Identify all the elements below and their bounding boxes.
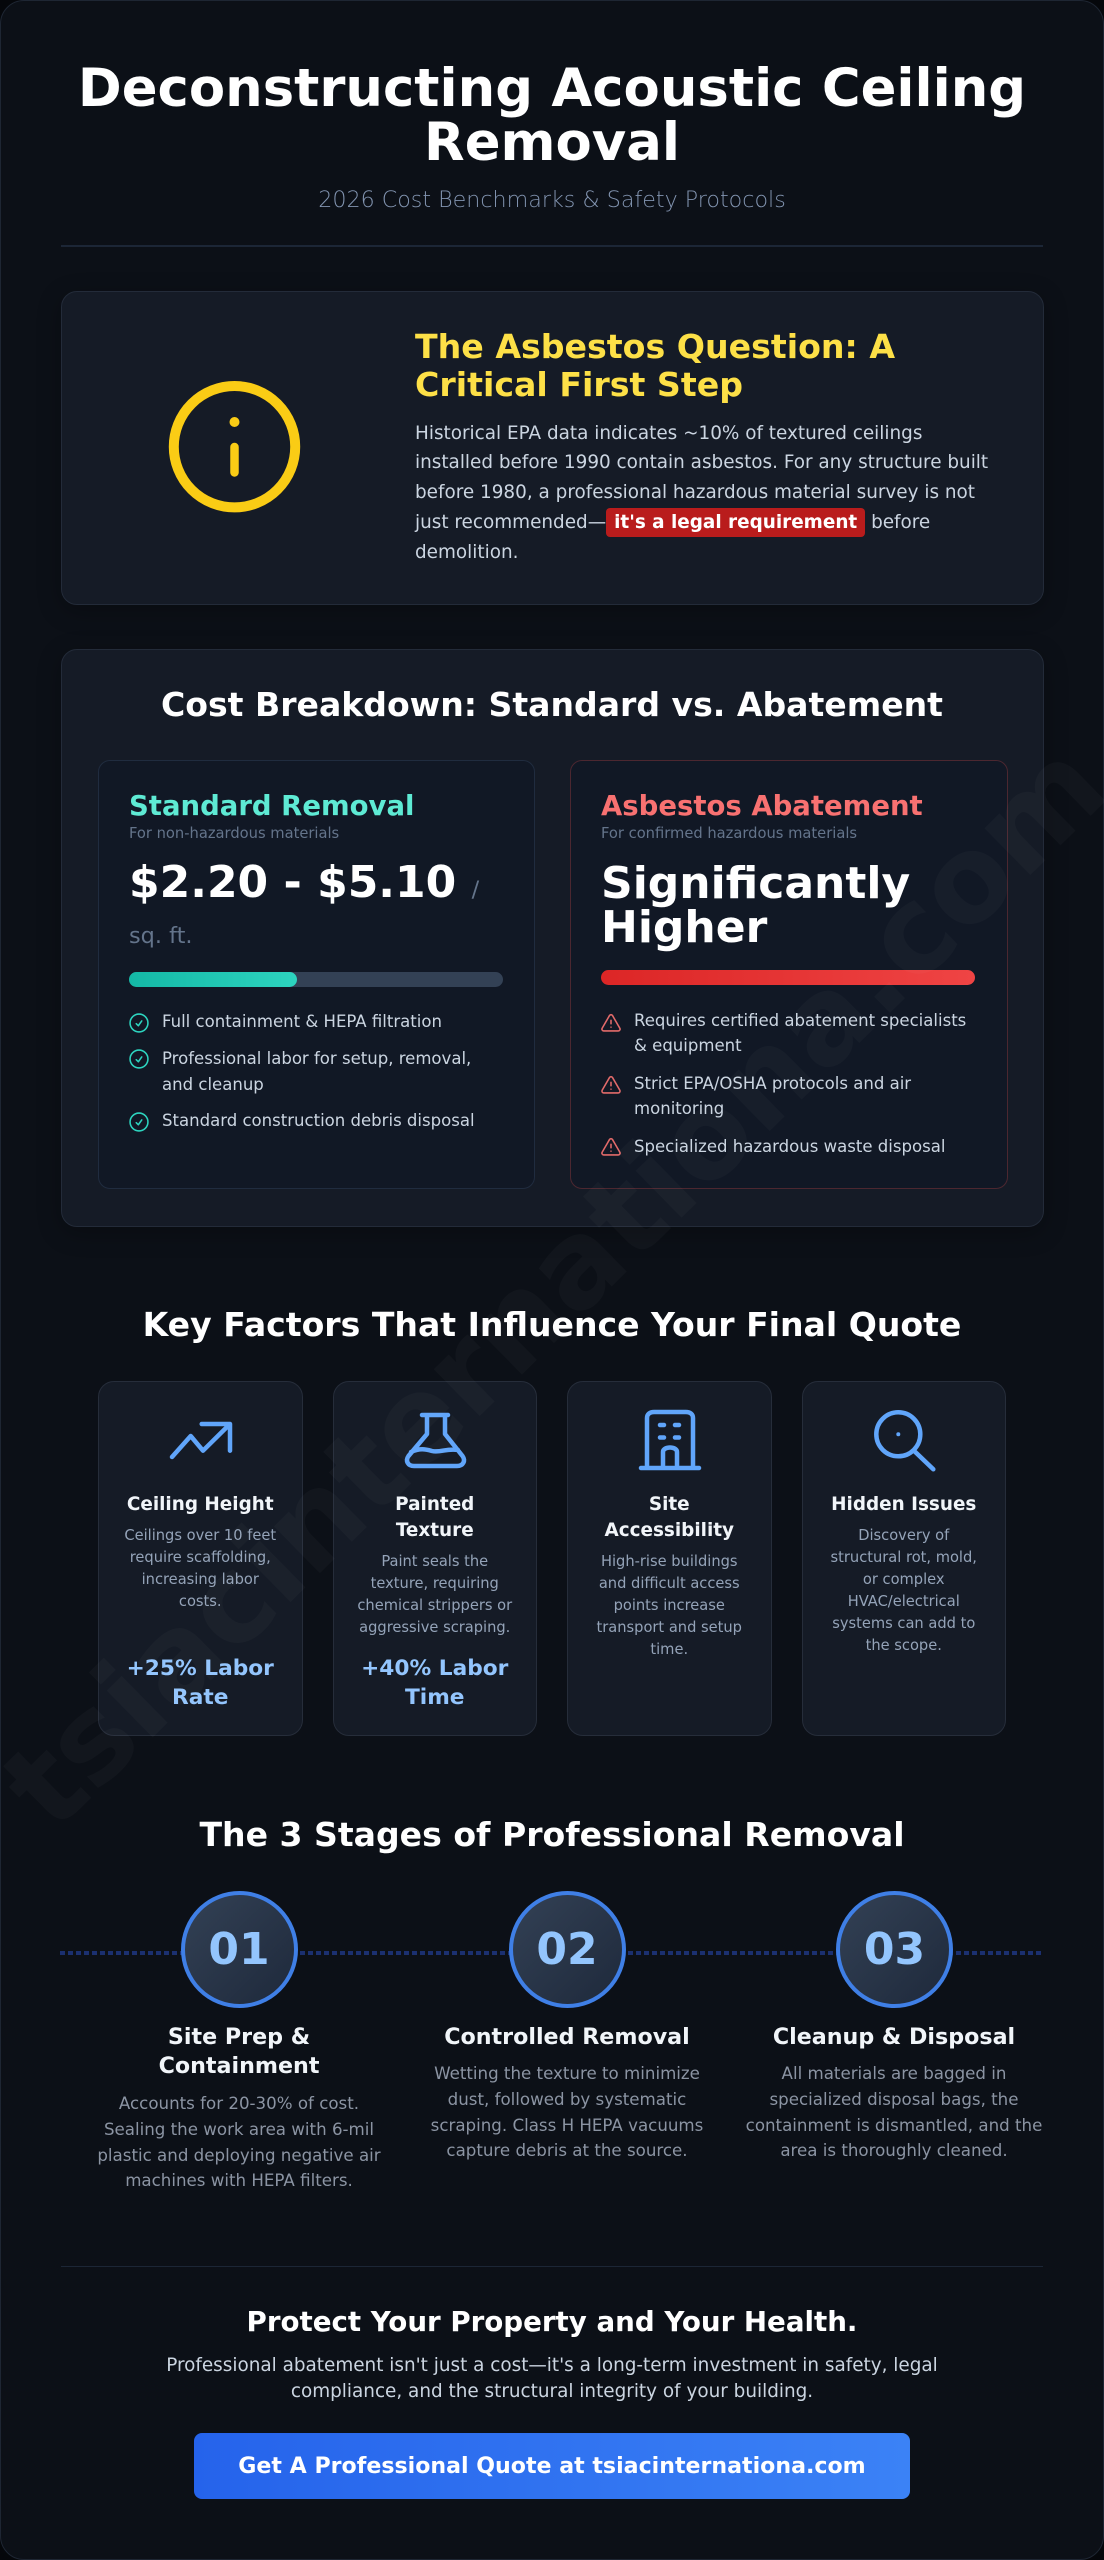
stage 1 title: Site Prep & bbox=[168, 2024, 310, 2050]
factor description: and difficult access bbox=[599, 1575, 740, 1592]
standard price: $2.20 - $5.10 / bbox=[129, 856, 479, 908]
standard removal subtitle: For non-hazardous materials bbox=[129, 825, 339, 842]
stage 2 description: capture debris at the source. bbox=[446, 2141, 688, 2160]
panel: factor painted texture bbox=[332, 1381, 537, 1736]
panel: cost breakdown bbox=[61, 649, 1044, 1227]
stage 2 description: Wetting the texture to minimize bbox=[434, 2064, 700, 2083]
factor title: Site bbox=[649, 1494, 690, 1515]
stage number 01 bbox=[180, 1891, 298, 2008]
icon: info circle bbox=[168, 381, 300, 512]
stage number 02: 02 bbox=[536, 1924, 598, 1975]
factor impact bbox=[361, 1656, 508, 1710]
item: waste bbox=[601, 1138, 621, 1156]
stage 3 description bbox=[746, 2064, 1042, 2160]
stage number 03 bbox=[836, 1891, 953, 2008]
factor description: chemical strippers or bbox=[357, 1597, 512, 1614]
factor description: systems can add to bbox=[832, 1615, 975, 1632]
factor title bbox=[395, 1494, 474, 1541]
abatement feature list: Specialized hazardous waste disposal bbox=[634, 1136, 945, 1156]
stage number 03: 03 bbox=[864, 1924, 925, 1975]
card: asbestos abatement bbox=[570, 760, 1008, 1189]
closing text: compliance, and the structural integrity of your building. bbox=[291, 2381, 813, 2402]
panel: asbestos question bbox=[61, 291, 1044, 605]
factor impact: Time bbox=[405, 1685, 465, 1710]
item: protocols bbox=[601, 1076, 621, 1094]
factor impact: Rate bbox=[172, 1685, 228, 1710]
factor description: Paint seals the bbox=[381, 1553, 488, 1570]
factor title: Accessibility bbox=[604, 1520, 734, 1541]
item: labor bbox=[129, 1049, 149, 1069]
card: standard removal bbox=[98, 760, 535, 1189]
factor description: aggressive scraping. bbox=[359, 1619, 510, 1636]
factor title: Ceiling Height bbox=[127, 1494, 274, 1515]
item: specialists bbox=[601, 1014, 621, 1032]
stage number 02 bbox=[508, 1891, 626, 2008]
factor description: HVAC/electrical bbox=[848, 1593, 960, 1610]
stage 1 description bbox=[97, 2094, 381, 2190]
asbestos heading: Critical First Step bbox=[415, 364, 743, 404]
factor description: increasing labor bbox=[142, 1571, 259, 1588]
stage 2 description: dust, followed by systematic bbox=[448, 2090, 686, 2109]
abatement feature list bbox=[601, 1010, 966, 1156]
factor description: texture, requiring bbox=[371, 1575, 499, 1592]
standard price bbox=[129, 856, 480, 948]
cost heading: Cost Breakdown: Standard vs. Abatement bbox=[161, 684, 943, 724]
panel: factor ceiling height bbox=[98, 1381, 302, 1736]
abatement feature list: Requires certified abatement specialists bbox=[634, 1010, 966, 1030]
standard price: sq. ft. bbox=[129, 922, 192, 948]
factor description: High-rise buildings bbox=[601, 1553, 738, 1570]
standard feature list: Full containment & HEPA filtration bbox=[162, 1012, 442, 1031]
panel: factor hidden issues bbox=[802, 1381, 1006, 1736]
asbestos body text bbox=[414, 422, 988, 563]
asbestos heading: The Asbestos Question: A bbox=[415, 327, 895, 366]
factor description: costs. bbox=[179, 1593, 222, 1610]
asbestos body text: Historical EPA data indicates ~10% of textured ceilings bbox=[415, 422, 922, 444]
factor description: require scaffolding, bbox=[130, 1549, 271, 1566]
abatement price: Higher bbox=[601, 902, 767, 952]
factor impact: +25% Labor bbox=[127, 1656, 274, 1681]
factor description bbox=[831, 1527, 977, 1654]
dashed timeline bbox=[60, 1951, 1044, 1955]
title: Deconstructing Acoustic Ceiling bbox=[78, 58, 1026, 119]
standard feature list bbox=[129, 1012, 475, 1132]
stage 2 title: Controlled Removal bbox=[444, 2024, 690, 2050]
factor title: Hidden Issues bbox=[831, 1494, 976, 1515]
factor description: or complex bbox=[863, 1571, 945, 1588]
stage 3 description: containment is dismantled, and the bbox=[746, 2116, 1042, 2135]
abatement cost bar bbox=[601, 970, 975, 985]
asbestos heading bbox=[415, 327, 895, 404]
stage 2 bbox=[431, 1891, 703, 2160]
abatement price bbox=[601, 858, 910, 952]
factor description bbox=[124, 1527, 276, 1610]
stage 3 description: All materials are bagged in bbox=[782, 2064, 1006, 2083]
stage 1 title: Containment bbox=[159, 2053, 319, 2079]
panel: factor site accessibility bbox=[567, 1381, 772, 1736]
closing text bbox=[166, 2355, 938, 2402]
abatement feature list: & equipment bbox=[634, 1036, 742, 1055]
abatement feature list: monitoring bbox=[634, 1099, 724, 1118]
closing heading: Protect Your Property and Your Health. bbox=[247, 2305, 857, 2338]
factor description: time. bbox=[650, 1641, 688, 1658]
asbestos body text: just recommended— it's a legal requirement before bbox=[415, 512, 930, 533]
factor description: the scope. bbox=[866, 1637, 942, 1654]
factor title: Texture bbox=[396, 1520, 474, 1541]
call to action button bbox=[194, 2433, 910, 2499]
item: containment bbox=[129, 1013, 149, 1033]
stage 1 description: Sealing the work area with 6-mil bbox=[104, 2120, 374, 2139]
asbestos body text: before 1980, a professional hazardous material survey is not bbox=[415, 482, 975, 503]
asbestos body text: demolition. bbox=[415, 542, 518, 563]
factor description bbox=[357, 1553, 512, 1636]
factor description bbox=[596, 1553, 742, 1658]
stage number 01: 01 bbox=[208, 1924, 270, 1975]
stage 1 description: plastic and deploying negative air bbox=[97, 2146, 381, 2165]
title: Removal bbox=[424, 112, 680, 173]
factor title: Painted bbox=[395, 1494, 474, 1515]
asbestos body text: installed before 1990 contain asbestos. For any structure built bbox=[415, 452, 988, 473]
closing text: Professional abatement isn't just a cost—it's a long-term investment in safety, legal bbox=[166, 2355, 938, 2376]
stage 1 description: machines with HEPA filters. bbox=[125, 2171, 353, 2190]
stage 1 description: Accounts for 20-30% of cost. bbox=[119, 2094, 359, 2113]
standard feature list: Standard construction debris disposal bbox=[162, 1111, 475, 1130]
stage 1 title bbox=[159, 2024, 319, 2079]
standard feature list: and cleanup bbox=[162, 1075, 264, 1094]
factor description: Discovery of bbox=[858, 1527, 949, 1544]
factor description: transport and setup bbox=[597, 1619, 742, 1636]
stage 3 title: Cleanup & Disposal bbox=[773, 2024, 1015, 2050]
factor description: Ceilings over 10 feet bbox=[124, 1527, 276, 1544]
key factors heading: Key Factors That Influence Your Final Quote bbox=[143, 1305, 961, 1344]
stage 2 description: scraping. Class H HEPA vacuums bbox=[431, 2116, 703, 2135]
stages heading: The 3 Stages of Professional Removal bbox=[199, 1815, 905, 1854]
call to action button: Get A Professional Quote at tsiacinternationa.com bbox=[238, 2453, 866, 2479]
stage 2 description bbox=[431, 2064, 703, 2160]
standard removal title: Standard Removal bbox=[129, 790, 414, 822]
item: disposal bbox=[129, 1112, 149, 1132]
abatement feature list: Strict EPA/OSHA protocols and air bbox=[634, 1074, 911, 1092]
stage 3 description: area is thoroughly cleaned. bbox=[780, 2141, 1008, 2160]
subtitle: 2026 Cost Benchmarks & Safety Protocols bbox=[318, 187, 786, 213]
factor title bbox=[604, 1494, 734, 1541]
abatement price: Significantly bbox=[601, 858, 910, 908]
stage 1 bbox=[97, 1891, 381, 2190]
factor impact: +40% Labor bbox=[361, 1656, 508, 1681]
stage 3 bbox=[746, 1891, 1042, 2160]
factor impact bbox=[127, 1656, 274, 1710]
standard cost bar bbox=[129, 972, 503, 987]
factor description: points increase bbox=[614, 1597, 725, 1614]
title bbox=[78, 58, 1026, 173]
factor description: structural rot, mold, bbox=[831, 1549, 977, 1566]
standard feature list: Professional labor for setup, removal, bbox=[162, 1049, 471, 1068]
stage 3 description: specialized disposal bags, the bbox=[769, 2090, 1018, 2109]
abatement subtitle: For confirmed hazardous materials bbox=[601, 825, 857, 842]
abatement title: Asbestos Abatement bbox=[601, 790, 923, 822]
